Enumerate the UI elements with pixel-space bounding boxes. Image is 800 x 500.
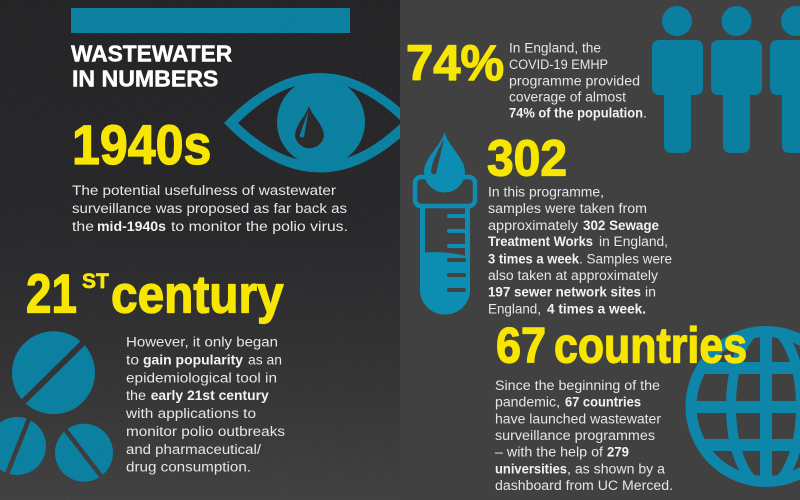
text: 67 countries description: , as shown by a [567,461,665,477]
panel: left background [0,0,400,500]
text: 67 countries description: pandemic, [495,395,560,411]
text: 302 description [488,185,672,317]
text: 67 countries description: dashboard from UC Merced. [495,478,673,494]
text: 302 description: . Samples were [579,251,672,267]
text: 302 description: approximately [488,218,579,234]
text: 21st century description: gain popularity [143,352,243,368]
text: 302 description: 4 times a week. [547,301,646,317]
text: 302 description: in England, [599,234,668,250]
text: 74% description: . [643,106,647,122]
stat: 67 countries: 67 [496,318,546,374]
text: 67 countries description: – with the help of [495,445,603,461]
text: 67 countries description: 279 [607,445,629,461]
text: 21st century description: early 21st century [151,388,269,404]
icon: eye with water drop [224,73,416,172]
title: IN NUMBERS [72,66,218,91]
text: 67 countries description: Since the beginning of the [495,378,660,394]
text: 21st century description: to [126,352,139,368]
text: 21st century description [125,335,285,476]
text: 302 description: samples were taken from [488,201,647,217]
stat: 21st century: ST [82,270,109,293]
stat: 1940s: 1940s [72,114,211,177]
icon: test tube with drop [415,132,475,314]
text: 1940s description [72,183,348,235]
text: 21st century description: the [126,388,146,404]
panel: right background [400,0,800,500]
text: 21st century description: However, it only began [126,335,278,351]
text: 1940s description: mid-1940s [97,219,166,235]
text: 302 description: 302 Sewage [583,218,659,234]
stat: 21st century [26,262,284,324]
stat: 21st century: century [111,264,284,324]
text: 21st century description: epidemiological tool in [126,370,277,386]
text: 21st century description: drug consumption. [126,460,251,476]
text: 67 countries description: universities [495,461,567,477]
stat: 67 countries: countries [554,317,747,373]
text: 67 countries description: 67 countries [565,395,641,411]
text: 21st century description: monitor polio outbreaks [126,424,285,440]
header bar [71,8,350,33]
text: 21st century description: as an [248,352,282,368]
text: 302 description: England, [488,301,541,317]
icon: three people [652,6,800,153]
text: 1940s description: to monitor the polio virus. [171,219,348,235]
text: 67 countries description: have launched wastewater [495,411,661,427]
text: 74% description: 74% of the population [509,106,643,122]
stat: 302: 302 [487,130,567,187]
title [71,40,233,91]
text: 1940s description: the [72,219,94,235]
text: 302 description: In this programme, [488,185,604,201]
text: 302 description: Treatment Works [488,234,593,250]
text: 1940s description: The potential usefulness of wastewater [72,183,336,199]
text: 67 countries description: surveillance programmes [495,428,655,444]
text: 74% description: In England, the [509,40,601,56]
text: 302 description: in [645,285,656,301]
text: 302 description: 197 sewer network sites [488,285,641,301]
icon: pills [0,331,113,482]
text: 21st century description: with applications to [125,406,256,422]
text: 1940s description: surveillance was proposed as far back as [72,201,347,217]
stat: 21st century: 21 [26,262,77,324]
text: 302 description: 3 times a week [488,251,579,267]
title: WASTEWATER [71,40,233,67]
text: 67 countries description [495,378,673,494]
stat: 74%: 74% [406,36,504,91]
text: 74% description: programme provided [509,74,640,90]
text: 74% description [509,40,647,122]
text: 74% description: COVID-19 EMHP [509,57,608,73]
text: 302 description: also taken at approximately [488,268,659,284]
text: 74% description: coverage of almost [509,90,626,106]
icon: globe [686,326,800,487]
text: 21st century description: and pharmaceutical/ [126,442,261,458]
